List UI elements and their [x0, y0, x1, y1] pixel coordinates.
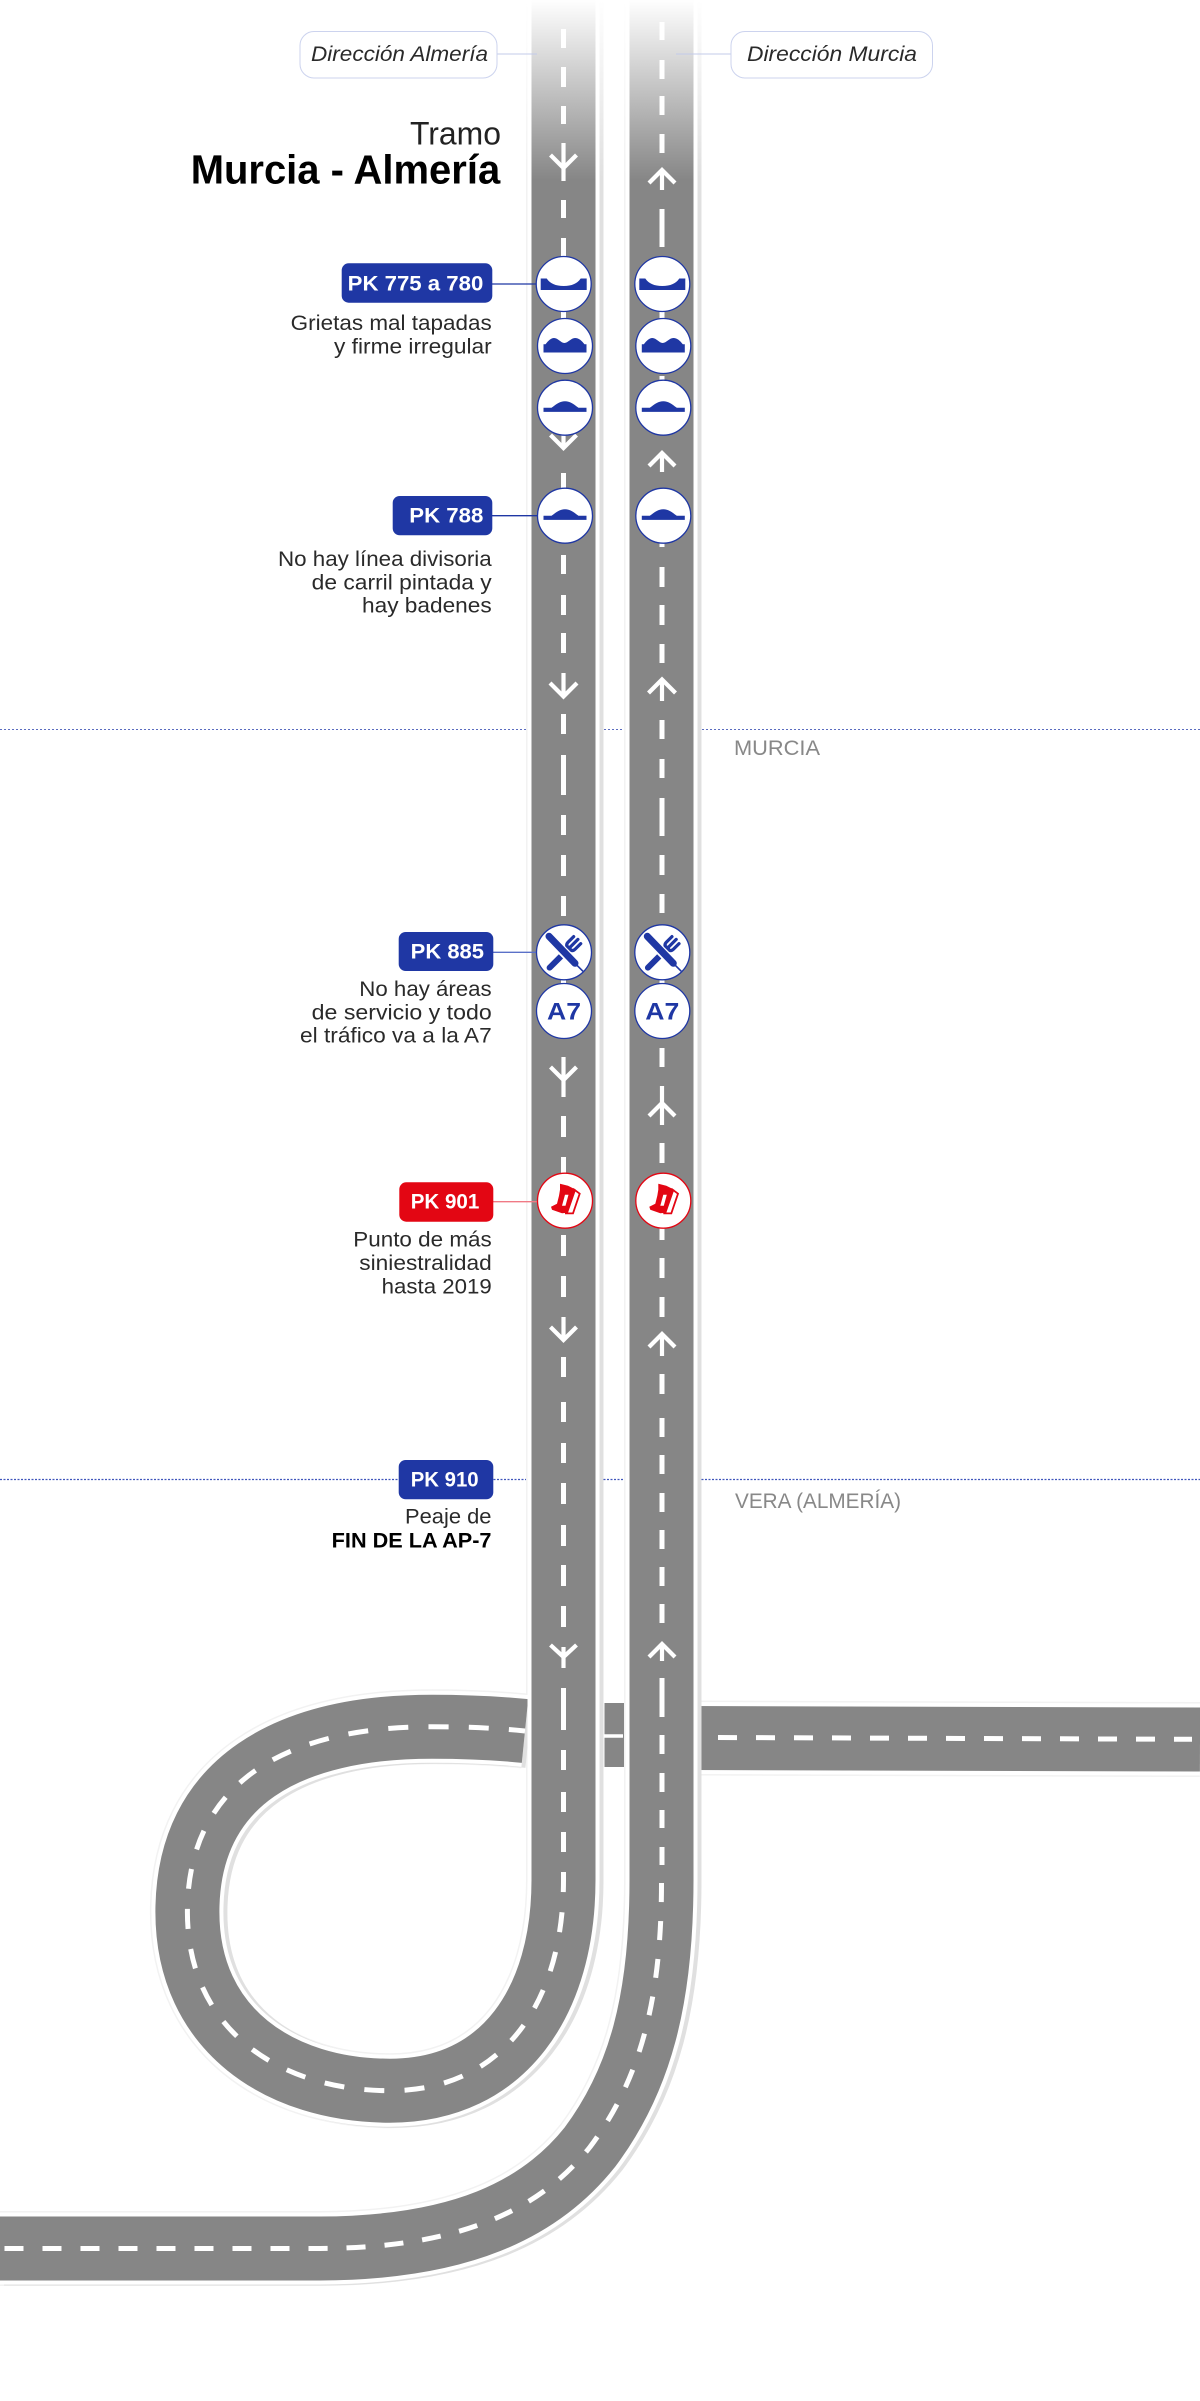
callout: PK 788: PK 788	[409, 505, 484, 528]
icon: A7 right: A7	[645, 998, 679, 1025]
callout: PK 910: PK 910	[411, 1469, 479, 1492]
label: Dirección Almería	[300, 32, 537, 78]
text: punto de más siniestralidad: Punto de más	[353, 1228, 492, 1252]
icon: no food right	[635, 925, 690, 980]
label: Dirección Murcia	[676, 32, 932, 78]
icon: A7 right	[635, 984, 690, 1038]
label: Dirección Almería: Dirección Almería	[311, 43, 488, 66]
text: peaje fin de la AP-7: FIN DE LA AP-7	[332, 1528, 492, 1552]
callout: PK 775 a 780: PK 775 a 780	[348, 272, 483, 295]
road: right carriageway curving west	[0, 0, 666, 2250]
callout: PK 910	[399, 1460, 493, 1499]
text: grietas: Grietas mal tapadas	[291, 311, 492, 335]
icon: speed bump left	[538, 380, 592, 435]
arrows: direction Murcia	[648, 170, 676, 1661]
road top fade	[520, 0, 710, 180]
icon: A7 left: A7	[547, 998, 581, 1025]
text: peaje fin de la AP-7	[332, 1504, 492, 1552]
text: no hay línea: No hay línea divisoria	[278, 547, 492, 571]
region label: Vera: VERA (ALMERÍA)	[735, 1490, 901, 1513]
text: peaje fin de la AP-7: Peaje de	[405, 1504, 492, 1528]
left lane dashes	[561, 29, 566, 1852]
text: punto de más siniestralidad	[353, 1228, 492, 1298]
icon: crash left	[538, 1173, 592, 1228]
text: no hay línea: de carril pintada y	[312, 570, 492, 594]
road: loop exit towards Murcia direction	[187, 0, 568, 2092]
icon: irregular surface left	[538, 318, 592, 374]
text: no hay línea: hay badenes	[362, 594, 492, 618]
road: left carriageway straight section	[564, 0, 568, 1861]
title	[191, 115, 501, 192]
road: horizontal road to the east	[690, 1738, 1200, 1740]
text: no hay áreas: el tráfico va a la A7	[300, 1024, 492, 1048]
text: punto de más siniestralidad: hasta 2019	[382, 1274, 492, 1298]
icon: pothole right	[635, 256, 690, 312]
dotted boundary line: Murcia	[0, 728, 1200, 730]
text: punto de más siniestralidad: siniestralidad	[359, 1251, 492, 1275]
callout: PK 885: PK 885	[411, 940, 484, 963]
text: no hay áreas: No hay áreas	[359, 977, 492, 1001]
icon: crash right	[636, 1173, 691, 1228]
icon: speed bump left PK 788	[538, 488, 592, 543]
title: Murcia - Almería	[191, 146, 501, 192]
label: Dirección Murcia: Dirección Murcia	[747, 43, 917, 66]
icon: speed bump right	[636, 380, 691, 435]
callout: PK 885	[399, 932, 537, 971]
region label: Murcia: MURCIA	[734, 737, 820, 760]
callout: PK 775 a 780	[342, 263, 537, 303]
road: loop centre dashes	[187, 1727, 564, 2091]
title: Tramo	[410, 115, 501, 151]
icon: no food left	[536, 925, 592, 980]
text: no hay áreas: de servicio y todo	[312, 1000, 492, 1024]
icon: speed bump right PK 788	[636, 488, 691, 543]
callout: PK 788	[393, 496, 537, 535]
icon: irregular surface right	[636, 318, 691, 374]
text: grietas	[291, 311, 492, 358]
icon: A7 left	[536, 984, 592, 1038]
callout: PK 901	[399, 1182, 537, 1222]
dotted boundary line: Vera	[0, 1478, 1200, 1480]
text: no hay áreas	[300, 977, 492, 1048]
right lane dashes	[660, 22, 664, 1865]
text: no hay línea	[278, 547, 492, 618]
callout: PK 901: PK 901	[411, 1190, 480, 1213]
text: grietas: y firme irregular	[334, 334, 492, 358]
icon: pothole left	[536, 256, 591, 312]
road: middle crossing segment	[604, 1735, 627, 1736]
arrows: direction Almería	[550, 143, 577, 1668]
